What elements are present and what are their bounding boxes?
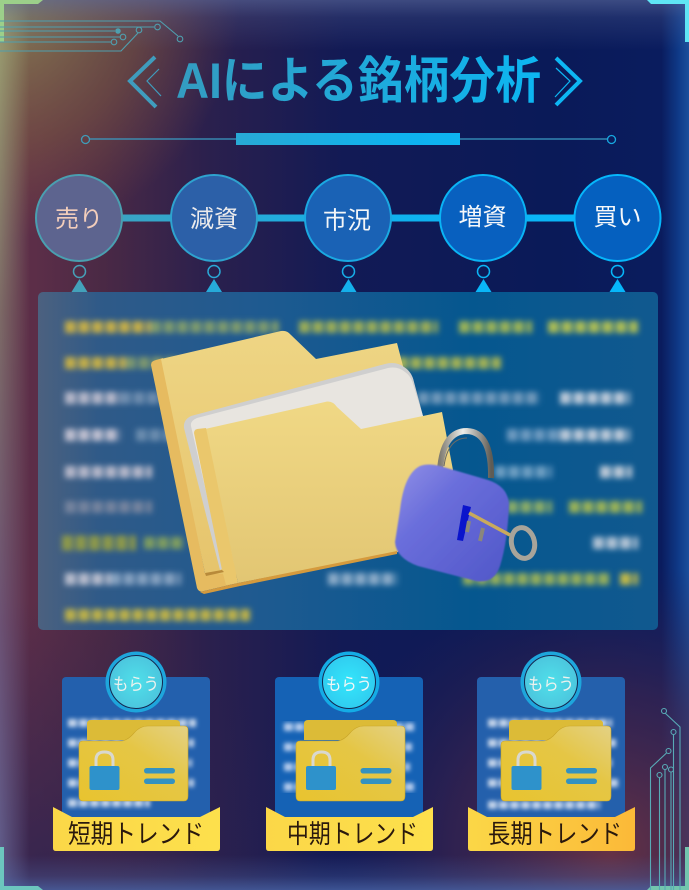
folder icon xyxy=(296,720,405,801)
folder icon xyxy=(501,720,611,801)
scale: 増資: 増資 xyxy=(458,204,506,231)
label banner xyxy=(468,807,635,851)
padlock shackle xyxy=(440,431,491,478)
scale: 市況: 市況 xyxy=(323,208,371,234)
folder icon xyxy=(79,720,188,801)
folder front xyxy=(194,402,453,594)
icon: right chevrons xyxy=(555,58,580,105)
scale: 売り xyxy=(36,175,122,292)
paper xyxy=(184,363,423,570)
card: 中期トレンド xyxy=(266,652,433,851)
label banner: 長期トレンド xyxy=(488,819,622,849)
scale: 増資 xyxy=(440,175,526,292)
folder back xyxy=(151,331,412,592)
blurred card text xyxy=(68,723,196,803)
badge xyxy=(520,652,582,712)
circuit lines: top left xyxy=(0,21,183,51)
keyhole xyxy=(457,505,471,541)
scale connector bar xyxy=(120,214,575,222)
padlock body xyxy=(395,464,509,581)
badge: もらう xyxy=(113,675,159,694)
illustration: folder with padlock xyxy=(151,331,537,594)
icon: left chevrons xyxy=(130,57,161,107)
badge: もらう xyxy=(326,675,372,694)
scale: 買い: 買い xyxy=(594,204,642,231)
card: 長期トレンド xyxy=(468,652,635,851)
badge xyxy=(106,652,166,712)
title text: AIによる銘柄分析 xyxy=(176,53,541,109)
scale: 買い xyxy=(574,175,660,292)
badge xyxy=(318,652,380,712)
scale: 減資: 減資 xyxy=(190,206,238,233)
card background xyxy=(62,677,210,822)
title divider xyxy=(82,133,616,145)
circuit lines: bottom right xyxy=(650,708,680,890)
card background xyxy=(477,677,625,822)
label banner: 短期トレンド xyxy=(68,819,204,849)
label banner xyxy=(53,807,220,851)
badge: もらう xyxy=(528,675,574,694)
scale: 売り: 売り xyxy=(55,206,103,233)
scale: 減資 xyxy=(171,175,257,292)
blurred text rows xyxy=(62,327,642,615)
blurred card text xyxy=(284,727,416,787)
blurred card text xyxy=(488,723,618,805)
label banner xyxy=(266,807,433,851)
label banner: 中期トレンド xyxy=(287,819,418,849)
key xyxy=(467,513,537,561)
scale: 市況 xyxy=(305,175,391,292)
panel: blurred analysis text xyxy=(38,292,658,630)
card background xyxy=(275,677,423,822)
title xyxy=(130,53,580,109)
padlock xyxy=(395,431,537,581)
card: 短期トレンド xyxy=(53,652,220,851)
